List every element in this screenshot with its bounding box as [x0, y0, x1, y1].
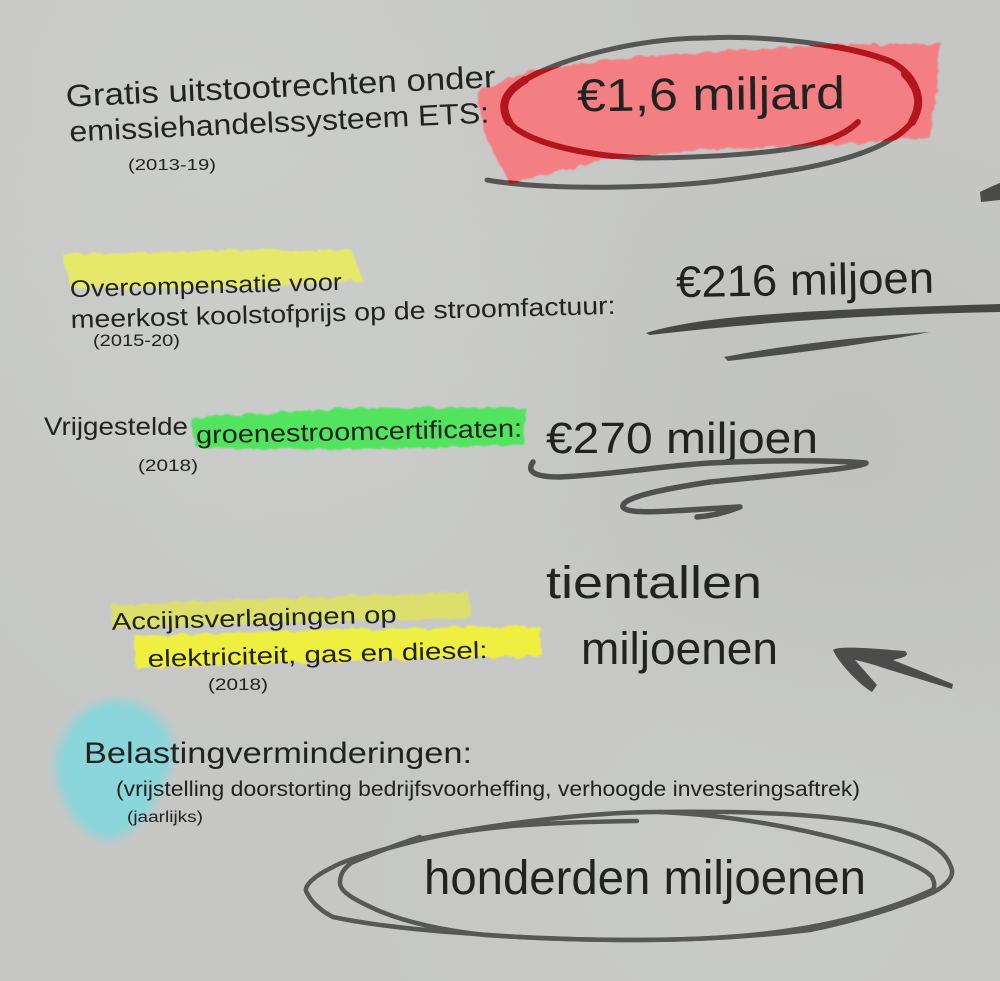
block: emission rights	[65, 37, 942, 187]
stroke: squiggle underline	[531, 461, 866, 517]
text: certificates label: groenestroomcertificaten:	[196, 415, 522, 449]
highlight: green	[190, 408, 526, 450]
block: tax reductions	[55, 700, 952, 940]
block: excise reductions	[111, 557, 953, 694]
text: period yearly: (jaarlijks)	[127, 809, 203, 826]
amount: 216 miljoen: €216 miljoen	[676, 254, 934, 307]
text: tax reductions label: Belastingverminderingen:	[84, 737, 472, 770]
block: green certificates	[44, 408, 866, 517]
text: excise label	[111, 599, 488, 674]
stroke: second underline	[724, 332, 930, 361]
amount: honderden miljoenen: honderden miljoenen	[424, 852, 866, 905]
block: overcompensation	[62, 250, 1000, 361]
highlight: yellow line one	[112, 592, 472, 628]
highlight: yellow line two	[134, 626, 542, 668]
highlight: red brush	[477, 44, 942, 184]
amount: tientallen miljoenen: tientallen	[546, 557, 762, 608]
text: period 2018: (2018)	[138, 456, 198, 475]
highlight: yellow	[62, 250, 362, 288]
amount: 270 miljoen: €270 miljoen	[546, 414, 818, 463]
text: period 2015-20: (2015-20)	[93, 331, 180, 350]
blob: blue	[55, 700, 174, 840]
text: excise label: Accijnsverlagingen op	[111, 601, 397, 636]
text: exempted label: Vrijgestelde	[44, 413, 188, 441]
text: emission rights label	[65, 59, 498, 149]
amount: 1,6 miljard: €1,6 miljard	[577, 66, 845, 121]
text: period 2013-19: (2013-19)	[128, 157, 216, 174]
circle: ellipse stroke, grey outside the brush and dark red on it	[487, 37, 919, 187]
amount: tientallen miljoenen: miljoenen	[581, 623, 778, 674]
circle: double ellipse	[306, 812, 952, 940]
text: overcompensation label	[70, 262, 616, 334]
stroke: thick underline	[646, 304, 1000, 335]
arrow: pointing to amount	[833, 648, 953, 692]
stroke: right edge mark	[980, 183, 1000, 202]
text: emission rights label: emissiehandelssysteem ETS:	[69, 98, 490, 149]
text: period 2018: (2018)	[208, 675, 268, 694]
amount: tientallen miljoenen	[546, 557, 778, 674]
text: excise label: elektriciteit, gas en diesel:	[147, 637, 488, 673]
text: emission rights label: Gratis uitstootrechten onder	[65, 59, 496, 114]
text: overcompensation label: meerkost koolstofprijs op de stroomfactuur:	[70, 292, 616, 334]
text: tax reductions detail: (vrijstelling doorstorting bedrijfsvoorheffing, verhoogde investeringsaftrek)	[116, 777, 860, 801]
text: overcompensation label: Overcompensatie voor	[70, 269, 342, 303]
